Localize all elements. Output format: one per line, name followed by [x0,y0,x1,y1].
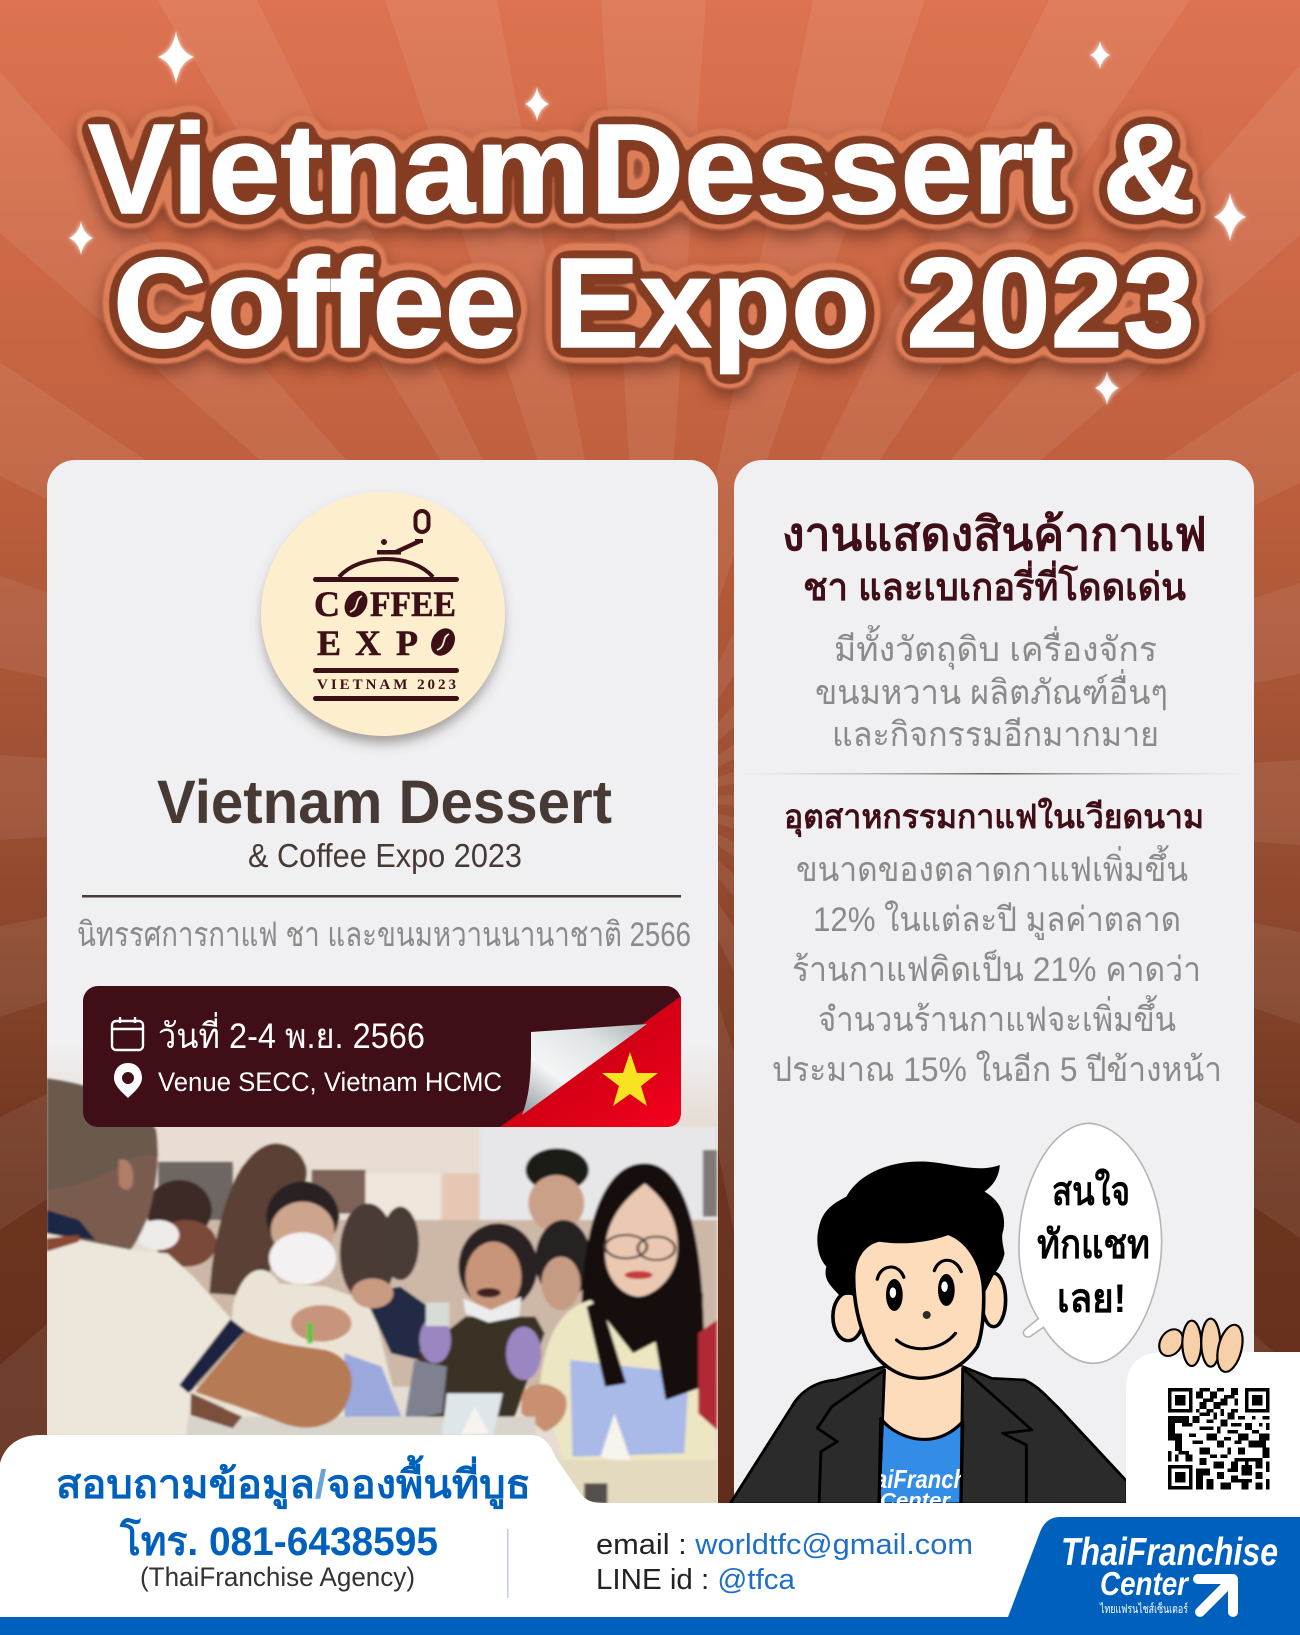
Thai event name: นิทรรศการกาแฟ ชา และขนมหวานนานาชาติ 2566 [77,916,691,954]
LINE id: LINE id : @tfca [596,1564,796,1596]
speech text: ทักแชท [1037,1223,1150,1267]
text block: market statistics: จำนวนร้านกาแฟจะเพิ่มขึ้น [818,995,1176,1039]
venue text: Venue SECC, Vietnam HCMC [158,1067,502,1097]
speech bubble [1019,1123,1162,1363]
mascot character [730,1161,1127,1512]
bottom contact strip [0,1435,1300,1635]
text block: market statistics [772,845,1222,1089]
text block: exhibits: และกิจกรรมอีกมากมาย [832,716,1159,754]
subheading: & Coffee Expo 2023: & Coffee Expo 2023 [248,837,522,874]
icon: calendar [112,1017,143,1050]
speech text: เลย! [1057,1277,1126,1321]
title: VietnamDessert & [88,98,1196,241]
footer bar and brand logo [0,1517,1300,1635]
panel: market information [734,460,1254,1520]
title [88,98,1196,375]
text block: market statistics: ร้านกาแฟคิดเป็น 21% คาดว่า [792,949,1201,989]
text block: exhibits: มีทั้งวัตถุดิบ เครื่องจักร [834,625,1157,670]
icon: hand holding card [1155,1319,1247,1374]
shirt logo text: aiFranch [875,1464,967,1494]
photo: visitors tasting at the expo [47,1040,718,1508]
heading: coffee trade show: งานแสดงสินค้ากาแฟ [782,508,1207,560]
speech text: สนใจ [1052,1168,1130,1214]
logo badge: Coffee Expo Vietnam 2023 [261,492,505,743]
logo badge: Coffee Expo Vietnam 2023: FFEE [370,584,456,624]
shirt logo text: Center [880,1490,951,1512]
email: email : worldtfc@gmail.com [596,1529,973,1561]
shirt logo text [881,1469,961,1503]
heading: coffee industry in Vietnam: อุตสาหกรรมกาแฟในเวียดนาม [784,797,1204,838]
text block: exhibits [815,625,1168,754]
Thai brand name: ไทยแฟรนไชส์เซ็นเตอร์ [1099,1601,1188,1616]
QR code [1168,1388,1270,1490]
text block: market statistics: ประมาณ 15% ในอีก 5 ปีข้างหน้า [772,1050,1222,1089]
text block: market statistics: 12% ในแต่ละปี มูลค่าตลาด [813,900,1181,940]
brand sub name: Center [1100,1565,1190,1602]
heading: Vietnam Dessert: Vietnam Dessert [157,768,612,836]
man in polo shirt [47,1078,352,1435]
QR card [1126,1319,1300,1503]
date and venue box [83,986,681,1127]
logo badge: Coffee Expo Vietnam 2023: VIETNAM 2023 [317,677,456,693]
logo badge: Coffee Expo Vietnam 2023: EXP [317,623,418,663]
agency name: (ThaiFranchise Agency) [140,1562,415,1592]
icon: arrow [1198,1579,1233,1612]
heading: enquire and book booth: สอบถามข้อมูล/จองพื้นที่บูธ [56,1455,531,1509]
subheading: tea and bakery: ชา และเบเกอรี่ที่โดดเด่น [803,560,1186,609]
sparkles [69,31,1246,405]
logo badge: Coffee Expo Vietnam 2023: C [314,584,340,624]
flag corner with star [500,996,681,1127]
title: Coffee Expo 2023 [113,232,1195,375]
panel: event details [47,460,718,1520]
date text: วันที่ 2-4 พ.ย. 2566 [158,1012,425,1056]
text block: exhibits: ขนมหวาน ผลิตภัณฑ์อื่นๆ [815,669,1168,712]
text block: market statistics: ขนาดของตลาดกาแฟเพิ่มขึ้น [796,845,1188,889]
icon: map pin [114,1063,142,1098]
phone number: โทร. 081-6438595 [119,1518,438,1564]
divider under heading [82,895,681,898]
speech text [1037,1168,1150,1321]
